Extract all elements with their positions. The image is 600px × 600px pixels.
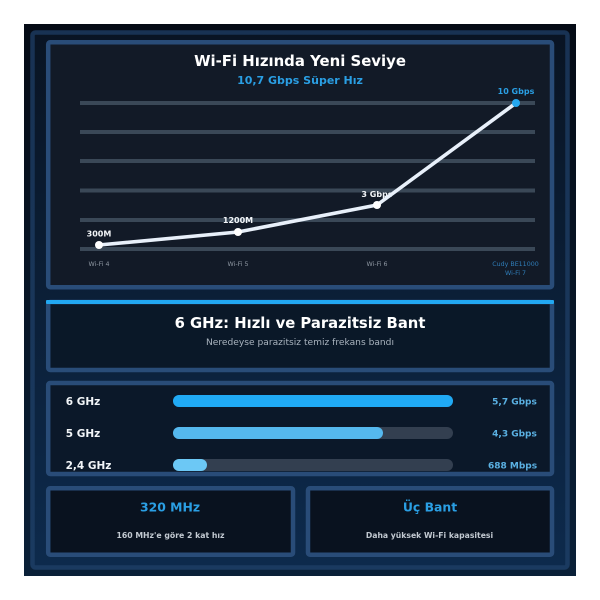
row: 6 GHz: 5,7 Gbps: [492, 398, 537, 408]
panel: 6 GHz band: [46, 300, 554, 370]
panel background: [48, 302, 552, 370]
panel: 320 MHz: 160 MHz'e göre 2 kat hız: [116, 531, 225, 540]
panel: band speeds: [48, 383, 552, 474]
value label: 1200M: 1200M: [223, 216, 253, 225]
row: 6 GHz: 6 GHz: [66, 396, 100, 408]
outer frame: [32, 32, 568, 568]
panel: 320 MHz: [48, 488, 293, 555]
axis label: Wi-Fi 5: Wi-Fi 5: [227, 261, 249, 268]
axis label: Wi-Fi 7: Cudy BE11000: [492, 261, 539, 268]
panel: 320 MHz: 320 MHz: [140, 500, 200, 514]
panel: Üç Bant: [308, 488, 552, 555]
axis label: Wi-Fi 7: Wi-Fi 7: [505, 270, 526, 277]
row: 2,4 GHz: [66, 459, 537, 472]
value label: 10 Gbps: 10 Gbps: [498, 87, 535, 96]
data point: Wi-Fi 6: [373, 201, 381, 209]
row: 5 GHz: 5 GHz: [66, 428, 100, 440]
panel: speed chart: [48, 42, 552, 287]
data point: Wi-Fi 5: [234, 228, 242, 236]
row: 5 GHz: 4,3 Gbps: [492, 430, 537, 440]
axis label: Wi-Fi 6: Wi-Fi 6: [366, 261, 388, 268]
row: 6 GHz: [66, 395, 537, 408]
panel background: [48, 42, 552, 287]
row: 2,4 GHz: 688 Mbps: [488, 462, 537, 472]
row: 5 GHz: [66, 427, 537, 440]
value label: 3 Gbps: 3 Gbps: [361, 190, 393, 199]
panel background: [48, 383, 552, 474]
panel: Üç Bant: Üç Bant: [403, 500, 457, 514]
grid lines: [80, 103, 535, 249]
chart subtitle: 10,7 Gbps Süper Hız: [237, 74, 363, 87]
band heading: 6 GHz: Hızlı ve Parazitsiz Bant: [175, 315, 425, 332]
speed line: [99, 103, 516, 245]
axis label: Wi-Fi 4: Wi-Fi 4: [88, 261, 110, 268]
data point: Wi-Fi 7: [512, 99, 520, 107]
row: 2,4 GHz: 2,4 GHz: [66, 460, 111, 472]
chart title: Wi-Fi Hızında Yeni Seviye: [194, 52, 406, 70]
band description: Neredeyse parazitsiz temiz frekans bandı: [206, 338, 394, 348]
panel: Üç Bant: Daha yüksek Wi-Fi kapasitesi: [366, 531, 493, 540]
value label: 300M: 300M: [87, 230, 111, 238]
data point: Wi-Fi 4: [95, 241, 103, 249]
accent bar: [46, 300, 554, 304]
